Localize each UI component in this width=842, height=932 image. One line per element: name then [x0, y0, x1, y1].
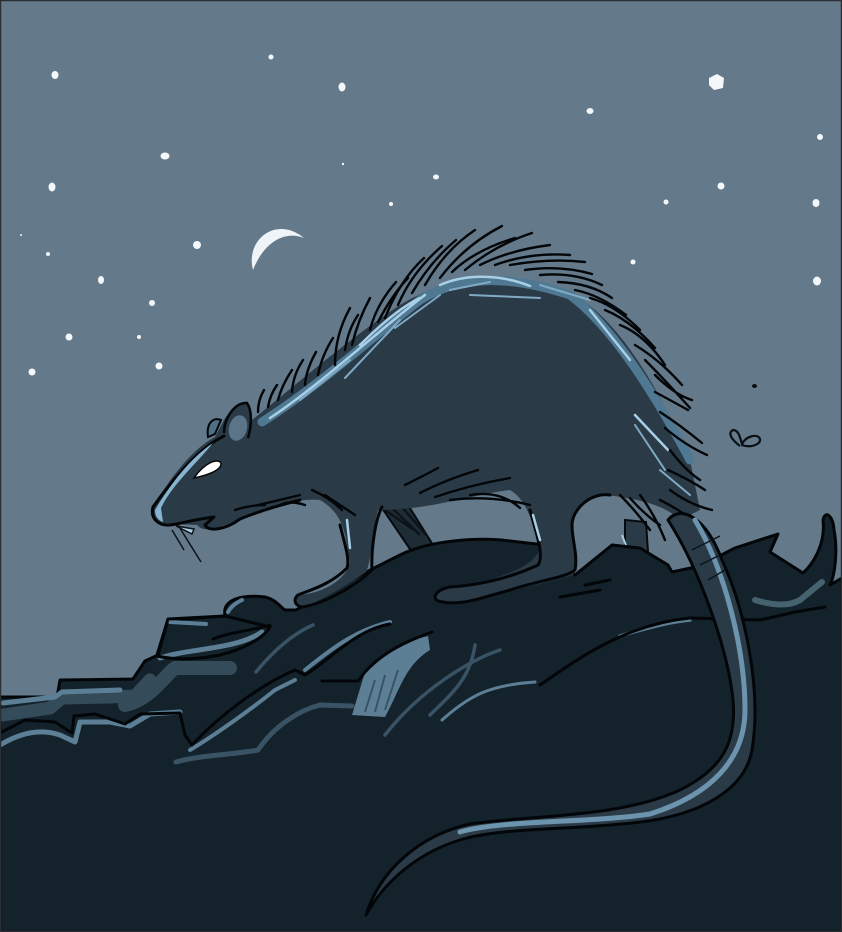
light fur along the back: [262, 277, 690, 495]
rat outline: [152, 436, 610, 607]
tail: [366, 513, 755, 915]
teeth and whiskers: [172, 525, 201, 562]
rock shading: [0, 582, 822, 762]
black rock lines: [0, 580, 825, 745]
stars: [20, 54, 823, 376]
ear: [208, 403, 251, 443]
rat body: [152, 278, 700, 607]
leg highlights: [347, 515, 540, 548]
black spines: [235, 226, 712, 540]
waterfall highlight: [352, 636, 430, 717]
crescent moon: [252, 229, 304, 270]
far legs of the rat: [382, 505, 648, 552]
rat: [152, 226, 755, 915]
ground and rocks: [0, 515, 842, 932]
fly: [730, 384, 760, 446]
eye: [194, 461, 221, 478]
face highlight: [155, 443, 213, 522]
